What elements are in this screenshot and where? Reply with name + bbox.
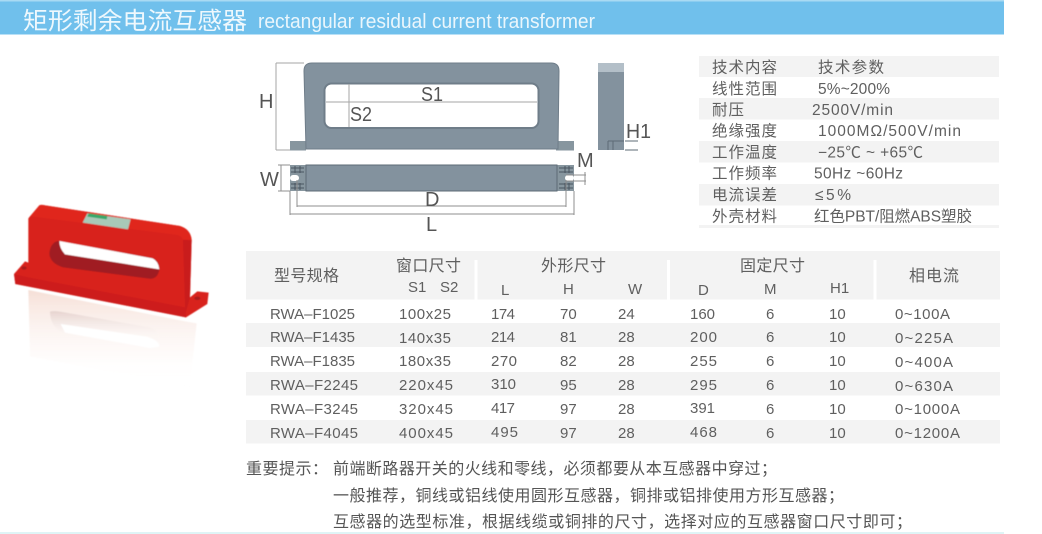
- table header: 窗口尺寸: [396, 257, 461, 275]
- row F1835: 180x35: [399, 353, 451, 370]
- row F1835: 0~400A: [895, 354, 953, 371]
- row F1025: 70: [560, 306, 577, 323]
- spec row: error: [712, 186, 851, 204]
- row F3245: 320x45: [399, 401, 453, 418]
- row F1435: 6: [766, 329, 774, 346]
- spec row: header: 技术参数: [818, 58, 884, 76]
- row F4045: 495: [491, 424, 518, 441]
- spec row: linear range: 5%~200%: [818, 81, 890, 98]
- row F1025: 0~100A: [895, 306, 950, 323]
- model table: [246, 251, 1000, 444]
- row F1835: RWA–F1835: [270, 353, 355, 370]
- spec row: insulation: 绝缘强度: [712, 122, 777, 140]
- header banner: [0, 0, 1004, 35]
- table header: M: [764, 281, 776, 298]
- row F1835: 10: [829, 353, 846, 370]
- row F1435: 200: [690, 329, 717, 346]
- window opening: [324, 84, 538, 128]
- right shade: [183, 240, 192, 314]
- row F1835: 28: [618, 353, 635, 370]
- spec row: withstand voltage: 耐压: [712, 101, 744, 119]
- spec row: housing: 红色PBT/阻燃ABS塑胶: [814, 208, 972, 226]
- table header: 固定尺寸: [740, 257, 805, 275]
- title in English: rectangular residual current transformer: [258, 10, 595, 33]
- row F1435: 214: [491, 329, 515, 346]
- spec row: linear range: [712, 80, 890, 98]
- row F1025: RWA–F1025: [270, 306, 355, 323]
- note line 1: 前端断路器开关的火线和零线，必须都要从本互感器中穿过；: [333, 460, 777, 478]
- spec row: temperature: −25℃ ~ +65℃: [818, 144, 923, 162]
- window: [49, 241, 159, 279]
- technical specifications table: [699, 56, 999, 228]
- row F2245: 95: [560, 377, 577, 394]
- spec row: temperature: [712, 144, 923, 162]
- label S1: S1: [421, 84, 443, 106]
- table header: H: [563, 281, 574, 298]
- row F2245: 28: [618, 377, 635, 394]
- spec row: withstand voltage: [712, 101, 893, 119]
- row F4045: RWA–F4045: [270, 425, 358, 442]
- spec row: insulation: [712, 122, 961, 140]
- reflection: [28, 290, 197, 387]
- label H1: H1: [626, 121, 651, 143]
- label M: M: [577, 150, 594, 172]
- label: [83, 213, 131, 229]
- dimension drawing: top view: [260, 150, 594, 236]
- table header: 外形尺寸: [541, 257, 606, 275]
- row F1435: 140x35: [399, 330, 451, 347]
- row F4045: 400x45: [399, 425, 453, 442]
- table header: 相电流: [909, 267, 959, 285]
- spec row: insulation: 1000MΩ/500V/min: [818, 123, 961, 140]
- row F4045: 468: [690, 424, 717, 441]
- row F2245: RWA–F2245: [270, 377, 358, 394]
- row F1025: 24: [618, 306, 635, 323]
- row F1435: 0~225A: [895, 330, 953, 347]
- spec row: linear range: 线性范围: [712, 80, 777, 98]
- product photo: red transformer: [14, 205, 209, 387]
- label S2: S2: [350, 104, 372, 126]
- row F1435: 10: [829, 329, 846, 346]
- table header: W: [628, 281, 643, 298]
- spec row: header: [712, 58, 884, 76]
- spec row: error: ≤5%: [815, 187, 851, 204]
- row F1835: 255: [690, 353, 717, 370]
- label H: H: [259, 91, 273, 113]
- row F4045: 97: [560, 425, 577, 442]
- spec row: frequency: 50Hz ~60Hz: [814, 166, 903, 182]
- spec row: header: 技术内容: [712, 58, 777, 76]
- table header: [246, 251, 1000, 300]
- row F2245: [246, 372, 1000, 396]
- row F1835: 82: [560, 353, 577, 370]
- row F2245: 295: [690, 377, 717, 394]
- row F1025: 6: [766, 306, 774, 323]
- table header: 型号规格: [274, 267, 339, 285]
- row F3245: 417: [491, 400, 515, 417]
- row F1025: 160: [690, 306, 715, 323]
- foot shade: [14, 274, 186, 317]
- row F3245: 97: [560, 401, 577, 418]
- row F3245: 0~1000A: [895, 401, 960, 418]
- row F1025: 174: [491, 306, 515, 323]
- table header: S1: [408, 279, 426, 296]
- note line 2: 一般推荐，铜线或铝线使用圆形互感器，铜排或铝排使用方形互感器；: [333, 487, 844, 505]
- body with feet: [14, 205, 209, 317]
- dimension drawing: front view: [259, 63, 574, 150]
- table header: H1: [830, 280, 849, 297]
- spec row: housing: 外壳材料: [712, 208, 777, 226]
- note line 3: 互感器的选型标准，根据线缆或铜排的尺寸，选择对应的互感器窗口尺寸即可；: [333, 512, 912, 531]
- label W: W: [260, 169, 279, 191]
- row F1435: RWA–F1435: [270, 329, 355, 346]
- row F4045: 28: [618, 425, 635, 442]
- row F2245: 10: [829, 377, 846, 394]
- note label: 重要提示：: [246, 460, 328, 478]
- row F3245: [270, 400, 960, 418]
- dimension drawing: side view: [598, 63, 651, 150]
- spec row: housing: [712, 208, 972, 226]
- row F2245: 0~630A: [895, 378, 953, 395]
- label L: L: [426, 214, 437, 236]
- row F4045: [246, 420, 1000, 444]
- table header: S2: [440, 279, 458, 296]
- row F2245: 220x45: [399, 377, 453, 394]
- table header: D: [698, 282, 709, 299]
- row F1435: [246, 323, 1000, 347]
- row F1835: 6: [766, 353, 774, 370]
- row F2245: 310: [491, 376, 516, 393]
- spec row: frequency: [712, 164, 903, 182]
- title in Chinese: 矩形剩余电流互感器: [23, 8, 247, 35]
- row F3245: 6: [766, 401, 774, 418]
- label D: D: [425, 189, 439, 211]
- row F1025: 10: [829, 306, 846, 323]
- important notes: [246, 460, 912, 531]
- row F1025: [270, 306, 950, 323]
- row F3245: 10: [829, 401, 846, 418]
- spec row: temperature: 工作温度: [712, 144, 777, 162]
- spec row: withstand voltage: 2500V/min: [812, 102, 893, 119]
- row F4045: 0~1200A: [895, 425, 960, 442]
- row F1025: 100x25: [399, 306, 451, 323]
- row F2245: 6: [766, 377, 774, 394]
- spec row: frequency: 工作频率: [712, 164, 777, 182]
- bottom accent strip: [0, 532, 1004, 534]
- row F1835: [270, 353, 953, 371]
- row F4045: 10: [829, 425, 846, 442]
- row F1435: 81: [560, 329, 577, 346]
- row F3245: RWA–F3245: [270, 401, 358, 418]
- top face: [28, 205, 192, 240]
- row F4045: 6: [766, 425, 774, 442]
- foot holes: [21, 266, 27, 270]
- row F3245: 28: [618, 401, 635, 418]
- table header: L: [501, 282, 509, 299]
- row F1835: 270: [491, 353, 517, 370]
- row F3245: 391: [690, 400, 715, 417]
- spec row: error: 电流误差: [712, 186, 777, 204]
- row F1435: 28: [618, 329, 635, 346]
